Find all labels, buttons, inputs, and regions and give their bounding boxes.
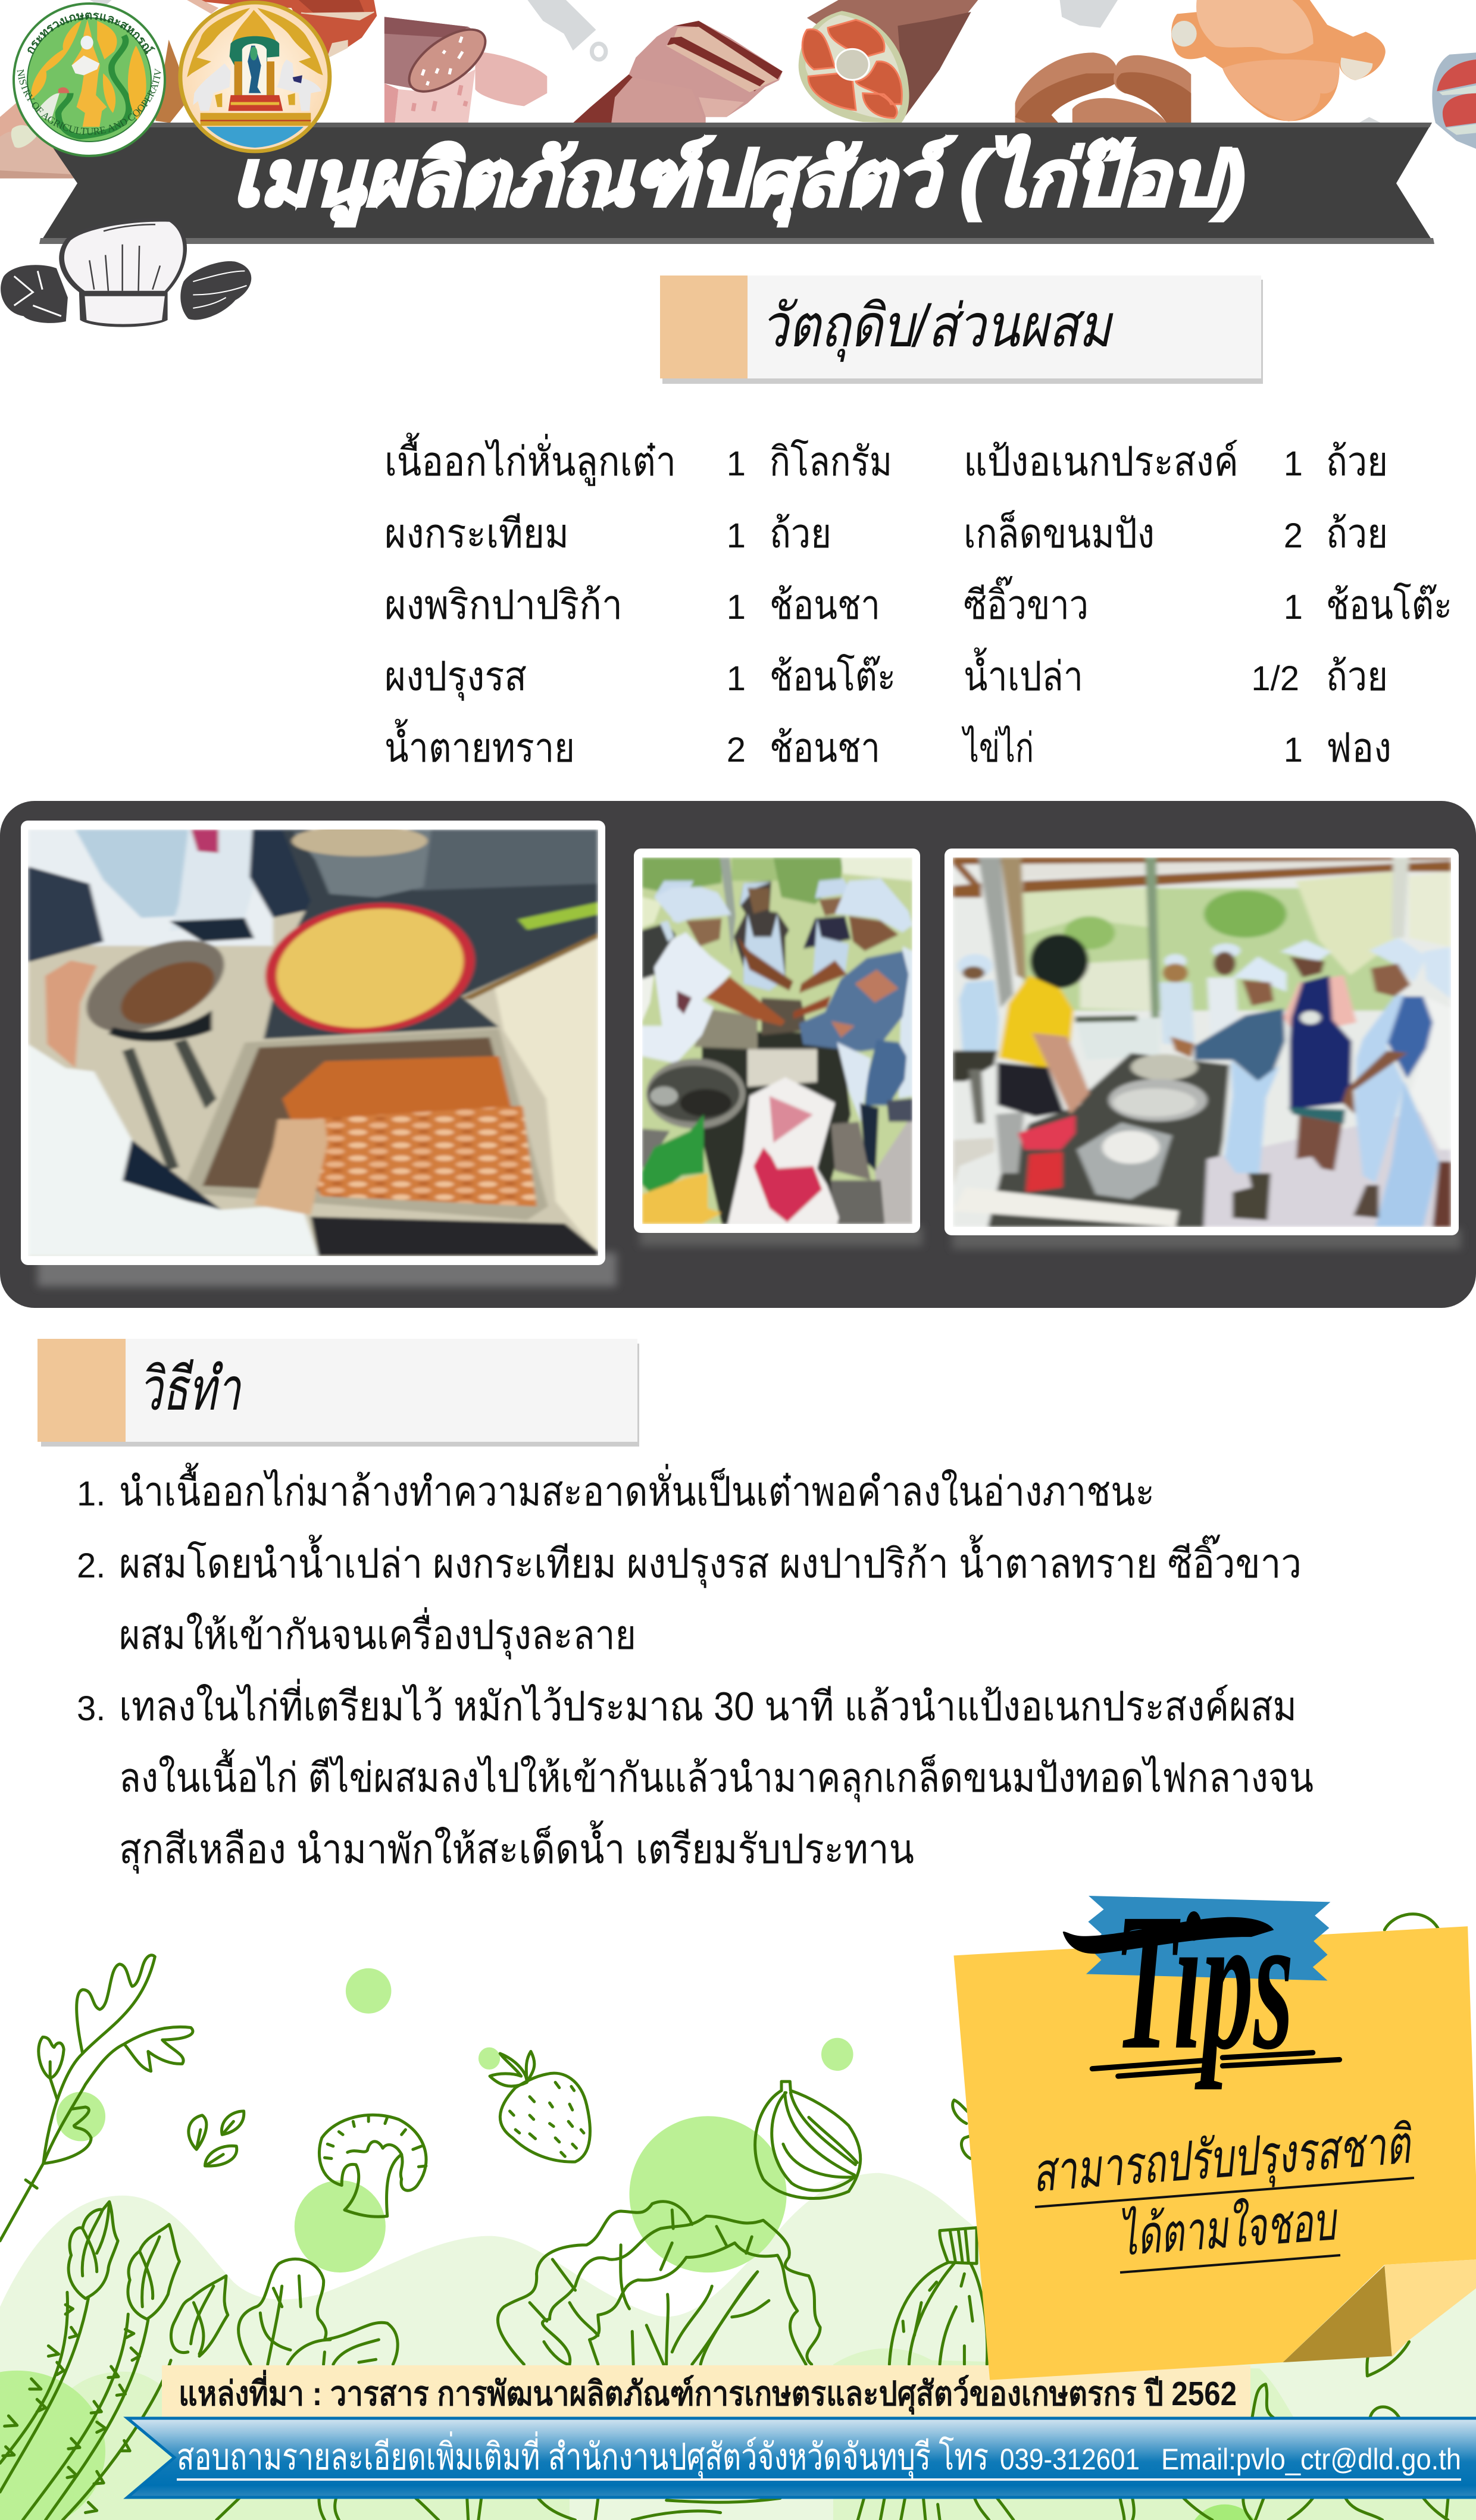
source strip: แหล่งที่มา : วารสาร การพัฒนาผลิตภัณฑ์การเกษตรและปศุสัตว์ของเกษตรกร ปี 2562 bbox=[179, 2369, 1237, 2415]
tips sticky note bbox=[953, 1873, 1476, 2380]
icon: chef hat with meat bbox=[1, 218, 251, 327]
ingredients list: ถ้วย bbox=[1326, 654, 1388, 699]
method steps text bbox=[77, 1463, 1314, 1874]
method steps text: ผสมโดยนำน้ำเปล่า ผงกระเทียม ผงปรุงรส ผงปาปริก้า น้ำตาลทราย ซีอิ๊วขาว bbox=[119, 1534, 1302, 1588]
method steps text: เทลงในไก่ที่เตรียมไว้ หมักไว้ประมาณ 30 นาที แล้วนำแป้งอเนกประสงค์ผสม bbox=[119, 1679, 1297, 1729]
icon: chicken drumstick bbox=[1171, 0, 1386, 121]
ingredients list: 1 bbox=[727, 516, 746, 555]
icon: meat leg cut bbox=[799, 0, 978, 123]
ingredients list: กิโลกรัม bbox=[770, 439, 892, 484]
ingredients list: น้ำเปล่า bbox=[964, 647, 1083, 699]
ingredients list: ถ้วย bbox=[1326, 511, 1388, 556]
heading: method: วิธีทำ bbox=[139, 1356, 242, 1423]
flourish bar above the Tips word bbox=[1063, 1917, 1274, 1954]
ingredients list: 1 bbox=[727, 444, 746, 483]
panel: method header bbox=[37, 1339, 639, 1447]
ingredients list: ผงกระเทียม bbox=[384, 511, 569, 556]
note curl bbox=[1283, 2259, 1476, 2362]
ingredients list: ช้อนชา bbox=[770, 725, 880, 771]
photo: group cooking demonstration bbox=[945, 849, 1459, 1235]
contact ribbon: 039-312601 bbox=[1000, 2443, 1140, 2476]
photo: group mixing ingredients bbox=[634, 849, 920, 1233]
Tips word: Tips bbox=[1114, 1873, 1294, 2091]
title ribbon bbox=[36, 123, 1434, 244]
panel: ingredients header bbox=[660, 276, 1263, 384]
icon: meats behind logos bbox=[0, 0, 377, 179]
ingredients list: ผงพริกปาปริก้า bbox=[384, 583, 623, 628]
ingredients list: 1 bbox=[1284, 444, 1303, 483]
icon: sliced ham bbox=[573, 21, 783, 123]
meat illustrations strip bbox=[0, 0, 1476, 179]
ingredients list: ช้อนชา bbox=[770, 583, 880, 628]
icon: mushroom bbox=[319, 2115, 426, 2217]
method steps text: 1. bbox=[77, 1475, 105, 1513]
blue tape bbox=[1086, 1896, 1330, 1981]
icon: lettuce bbox=[498, 2202, 820, 2364]
icon: spinach bbox=[239, 2259, 398, 2364]
ingredients list: 2 bbox=[1284, 516, 1303, 555]
ingredients list: เกล็ดขนมปัง bbox=[964, 510, 1155, 556]
contact ribbon: สอบถามรายละเอียดเพิ่มเติมที่ สำนักงานปศุสัตว์จังหวัดจันทบุรี โทร bbox=[177, 2431, 989, 2479]
method steps text: 2. bbox=[77, 1547, 105, 1585]
icon: sausages bbox=[1015, 52, 1191, 123]
sticky note paper bbox=[953, 1926, 1476, 2380]
ingredients list: แป้งอเนกประสงค์ bbox=[964, 439, 1239, 484]
icon: parsley sprig bbox=[0, 1955, 193, 2241]
method steps text: ผสมให้เข้ากันจนเครื่องปรุงละลาย bbox=[119, 1607, 636, 1660]
icon: small leaves bbox=[189, 2111, 244, 2166]
line art: vegetables bbox=[0, 1914, 1448, 2520]
icon: strawberry bbox=[490, 2052, 590, 2162]
icon: salami and ham bbox=[384, 17, 547, 123]
icon: asparagus bbox=[0, 2202, 228, 2520]
heading: ingredients: วัตถุดิบ/ส่วนผสม bbox=[761, 293, 1114, 362]
icon: background leaves right bbox=[858, 1914, 1448, 2520]
ingredients list bbox=[384, 433, 1452, 771]
ingredients list: ฟอง bbox=[1326, 725, 1391, 771]
panel: photo strip bbox=[0, 801, 1476, 1308]
ingredients list: ผงปรุงรส bbox=[384, 654, 527, 701]
method steps text: นำเนื้ออกไก่มาล้างทำความสะอาดหั่นเป็นเต๋าพอคำลงในอ่างภาชนะ bbox=[119, 1463, 1155, 1514]
source strip bbox=[162, 2365, 1250, 2417]
icon: gourd bbox=[889, 2228, 987, 2364]
contact ribbon bbox=[127, 2418, 1476, 2497]
logo: Department of Livestock seal bbox=[178, 1, 332, 153]
icon: grey utensils bbox=[527, 0, 1381, 123]
ingredients list: ถ้วย bbox=[770, 511, 831, 556]
ingredients list: ช้อนโต๊ะ bbox=[770, 653, 896, 699]
ingredients list: ถ้วย bbox=[1326, 439, 1388, 484]
logo: Ministry of Agriculture seal bbox=[12, 2, 166, 157]
icon: meat right edge bbox=[1432, 52, 1476, 149]
tip text line two: ได้ตามใจชอบ bbox=[1117, 2191, 1340, 2267]
ingredients list: ไข่ไก่ bbox=[961, 725, 1034, 771]
ingredients list: น้ำตายทราย bbox=[384, 719, 575, 771]
method steps text: สุกสีเหลือง นำมาพักให้สะเด็ดน้ำ เตรียมรับประทาน bbox=[119, 1820, 914, 1874]
ingredients list: 2 bbox=[727, 731, 746, 769]
ingredients list: 1 bbox=[727, 588, 746, 627]
ingredients list: 1 bbox=[1284, 588, 1303, 627]
method steps text: 3. bbox=[77, 1689, 105, 1728]
icon: onion bbox=[755, 2081, 861, 2199]
ingredients list: เนื้ออกไก่หั่นลูกเต๋า bbox=[384, 433, 676, 486]
ingredients list: 1/2 bbox=[1251, 659, 1299, 698]
ingredients list: ช้อนโต๊ะ bbox=[1326, 582, 1452, 628]
seal ring thai text: กระทรวงเกษตรและสหกรณ์ bbox=[27, 12, 155, 55]
ingredients list: 1 bbox=[727, 659, 746, 698]
ingredients list: 1 bbox=[1284, 731, 1303, 769]
photo: tray of marinated chicken bbox=[21, 821, 605, 1265]
title text: เมนูผลิตภัณฑ์ปศุสัตว์ (ไก่ป๊อป) bbox=[233, 135, 1245, 226]
method steps text: ลงในเนื้อไก่ ตีไข่ผสมลงไปให้เข้ากันแล้วนำมาคลุกเกล็ดขนมปังทอดไฟกลางจน bbox=[119, 1749, 1314, 1802]
ingredients list: ซีอิ๊วขาว bbox=[964, 575, 1089, 628]
